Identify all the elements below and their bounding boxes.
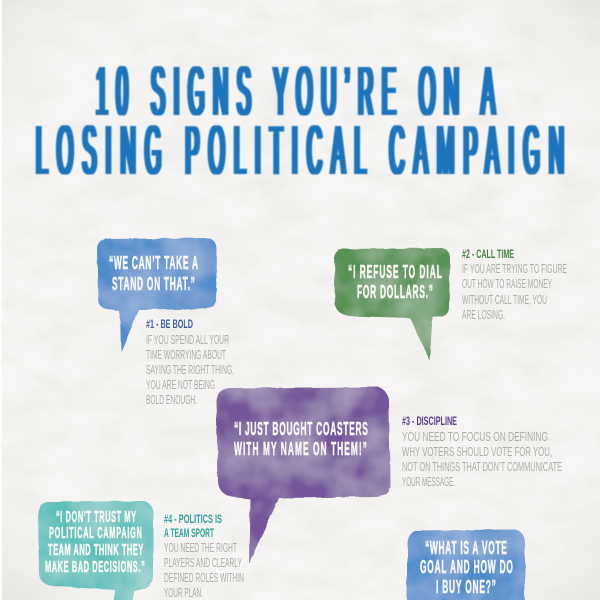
quote text: [348, 263, 442, 303]
quote text: [420, 539, 513, 598]
title: [36, 51, 564, 189]
quote text: GOAL AND HOW DO: [420, 558, 513, 578]
quote text: “I JUST BOUGHT COASTERS: [234, 420, 368, 440]
panel: sign 4 team sport: [38, 501, 153, 600]
text block: sign 4 description: DEFINED ROLES WITHIN: [164, 570, 244, 585]
text block: sign 1 description: [146, 317, 234, 407]
text block: sign 3 description: #3 - DISCIPLINE: [402, 414, 457, 428]
text block: sign 1 description: TIME WORRYING ABOUT: [146, 347, 226, 362]
text block: sign 4 description: YOUR PLAN.: [164, 585, 203, 600]
text block: sign 2 description: [462, 247, 567, 322]
quote text: TEAM AND THINK THEY: [48, 541, 144, 559]
quote text: FOR DOLLARS.”: [357, 283, 433, 303]
text block: sign 4 description: YOU NEED THE RIGHT: [164, 540, 237, 555]
quote text: “WHAT IS A VOTE: [425, 539, 507, 559]
panel: sign 5 vote goal: [407, 530, 525, 600]
text block: sign 3 description: [402, 414, 562, 489]
text block: sign 4 description: PLAYERS AND CLEARLY: [164, 555, 242, 570]
quote text: MAKE BAD DECISIONS.”: [45, 558, 145, 576]
panel: sign 3 discipline: [216, 387, 390, 563]
quote text: “WE CAN’T TAKE A: [109, 254, 198, 274]
text block: sign 4 description: #4 - POLITICS IS: [164, 512, 222, 526]
quote text: WITH MY NAME ON THEM!”: [234, 440, 367, 460]
text block: sign 3 description: YOUR MESSAGE.: [402, 474, 455, 489]
quote text: [234, 420, 368, 460]
text block: sign 4 description: [164, 512, 244, 600]
quote text: I BUY ONE?”: [436, 578, 496, 598]
panel: sign 1 be bold: [97, 238, 217, 352]
text block: sign 1 description: YOU ARE NOT BEING: [146, 377, 215, 392]
text block: sign 1 description: #1 - BE BOLD: [146, 317, 193, 331]
text block: sign 2 description: #2 - CALL TIME: [462, 247, 514, 261]
quote text: STAND ON THAT.”: [112, 275, 195, 295]
speech bubble: blue: [97, 238, 217, 352]
quote text: “I DON’T TRUST MY: [56, 508, 136, 526]
speech bubble: purple: [216, 387, 390, 563]
text block: sign 1 description: BOLD ENOUGH.: [146, 392, 197, 407]
text block: sign 2 description: ARE LOSING.: [462, 307, 505, 322]
quote text: [109, 254, 198, 295]
quote text: POLITICAL CAMPAIGN: [49, 524, 142, 542]
title: 10 SIGNS YOU’RE ON A: [96, 51, 495, 130]
text block: sign 1 description: IF YOU SPEND ALL YOUR: [146, 332, 229, 347]
speech bubble: green: [334, 248, 450, 361]
text block: sign 1 description: SAYING THE RIGHT THING,: [146, 362, 234, 377]
title: LOSING POLITICAL CAMPAIGN: [36, 110, 564, 189]
panel: sign 2 call time: [334, 248, 450, 361]
quote text: “I REFUSE TO DIAL: [348, 263, 442, 283]
text block: sign 4 description: A TEAM SPORT: [164, 526, 214, 540]
quote text: [45, 508, 145, 576]
speech bubble: blue: [407, 530, 525, 600]
speech bubble: teal: [38, 501, 153, 600]
